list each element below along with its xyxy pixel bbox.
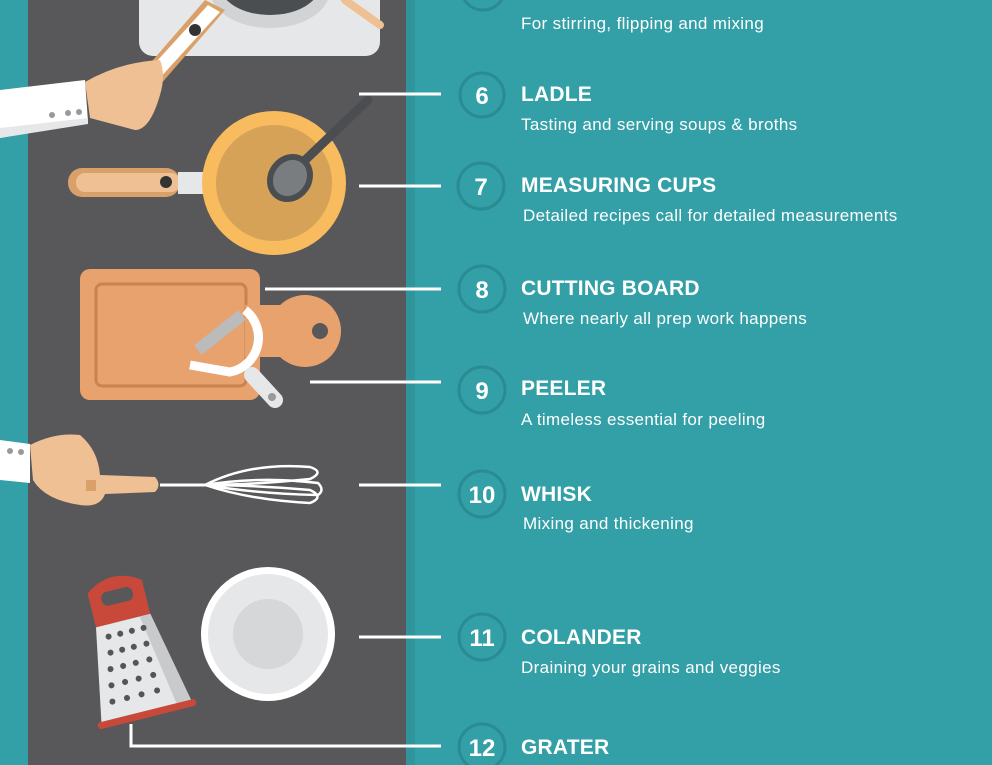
item 6: LADLE bbox=[521, 83, 592, 106]
item 8: CUTTING BOARD bbox=[521, 277, 700, 300]
illustration panel: 8 bbox=[475, 277, 489, 304]
item 10: Mixing and thickening bbox=[523, 514, 694, 533]
item 9: PEELER bbox=[521, 377, 606, 400]
item 9: A timeless essential for peeling bbox=[521, 410, 766, 429]
item 7: Detailed recipes call for detailed measurements bbox=[523, 206, 898, 225]
item 6: Tasting and serving soups & broths bbox=[521, 115, 798, 134]
item 10: WHISK bbox=[521, 483, 592, 506]
number circles bbox=[458, 0, 505, 765]
icon: stove with pan bbox=[139, 0, 380, 85]
illustration panel: 9 bbox=[475, 378, 489, 405]
icon: hand holding pan bbox=[0, 60, 163, 138]
illustration panel: 6 bbox=[475, 83, 489, 110]
icon: grater bbox=[64, 565, 197, 730]
connector lines bbox=[131, 94, 441, 746]
icon: colander bbox=[201, 567, 335, 701]
illustration panel: 7 bbox=[474, 174, 488, 201]
item 5 description: For stirring, flipping and mixing bbox=[521, 14, 764, 33]
item 11: COLANDER bbox=[521, 626, 642, 649]
illustration panel: 11 bbox=[469, 625, 495, 652]
item 7: MEASURING CUPS bbox=[521, 174, 716, 197]
illustration panel: 12 bbox=[469, 735, 495, 762]
illustration panel: 10 bbox=[469, 482, 495, 509]
item 8: Where nearly all prep work happens bbox=[523, 309, 807, 328]
item 11: Draining your grains and veggies bbox=[521, 658, 781, 677]
icon: hand with whisk bbox=[0, 434, 322, 506]
item 12: GRATER bbox=[521, 736, 609, 759]
icon: pan with ladle bbox=[68, 100, 368, 255]
icon: cutting board with peeler bbox=[80, 269, 341, 401]
